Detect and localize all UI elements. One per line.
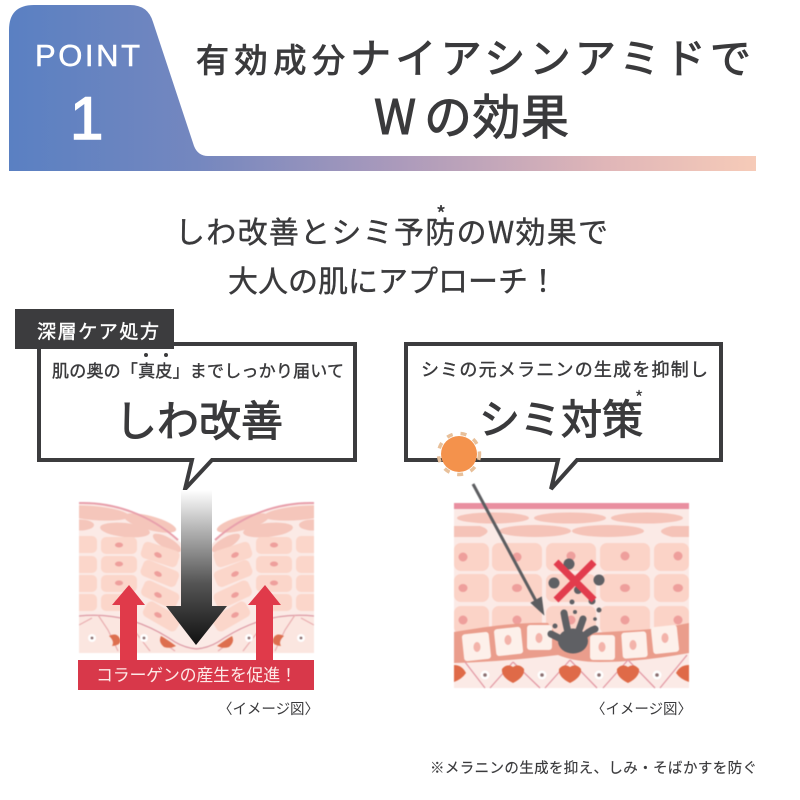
dermal dots (480, 670, 662, 680)
asterisk: * (635, 384, 643, 411)
melanin blob (551, 613, 595, 654)
subheading: しわ改善とシミ予防のW効果で (175, 208, 608, 252)
dermis fibres (465, 655, 687, 688)
cell nuclei (458, 552, 683, 624)
skin illustration: spot (454, 484, 689, 688)
basal layer (454, 623, 689, 663)
tag: deep layer care: 深層ケア処方 (37, 317, 159, 344)
title: W (374, 78, 416, 148)
skin base (79, 503, 314, 653)
red up arrow right (248, 585, 281, 662)
subheading: 大人の肌にアプローチ！ (228, 257, 558, 301)
title: ナイアシンアミドで (350, 25, 751, 85)
caption left: 〈イメージ図〉 (218, 698, 319, 719)
footnote: ※メラニンの生成を抑え、しみ・そばかすを防ぐ (430, 757, 757, 778)
red up arrow left (112, 585, 145, 662)
skin cells (78, 502, 314, 652)
subheading (175, 199, 608, 301)
sun icon (438, 434, 480, 474)
subheading: * (436, 199, 446, 229)
basal nuclei (474, 633, 668, 652)
number 1: 1 (70, 85, 103, 152)
collagen banner text: コラーゲンの産生を促進！ (96, 661, 297, 686)
speech bubble: spot care (406, 344, 721, 489)
bubble heading: wrinkle: しわ改善 (115, 388, 283, 449)
skin illustration: wrinkle (78, 490, 314, 690)
tag: deep layer care (15, 309, 174, 349)
bubble heading: spot: シミ対策 (479, 386, 643, 446)
header band (9, 5, 756, 171)
emphasis dots (144, 353, 168, 357)
collagen banner (78, 660, 314, 690)
top skin band (454, 503, 689, 509)
red cross (556, 562, 594, 600)
title (196, 25, 751, 148)
bubble subtitle: spot: シミの元メラニンの生成を抑制し (421, 356, 708, 382)
UV arrow (473, 484, 543, 613)
caption right: 〈イメージ図〉 (591, 698, 692, 719)
bubble subtitle: wrinkle: 肌の奥の「真皮」までしっかり届いて (52, 357, 344, 382)
spinous cells (454, 543, 689, 634)
melanocyte hearts (454, 665, 689, 683)
flat upper cells (454, 512, 689, 537)
speech bubble: wrinkle care (39, 344, 355, 489)
melanin particles (548, 558, 604, 628)
POINT label: POINT (35, 38, 140, 73)
title: の効果 (424, 78, 569, 148)
black down arrow (166, 490, 227, 645)
basal cells (462, 625, 679, 661)
title: 有効成分 (196, 34, 345, 82)
